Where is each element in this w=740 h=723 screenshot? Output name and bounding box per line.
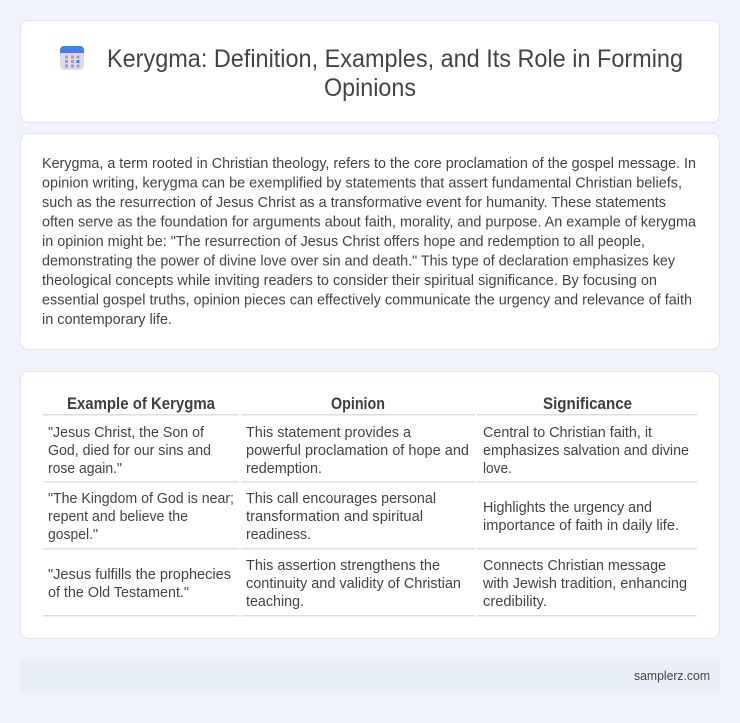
- table row 1: Central to Christian faith, it: [483, 425, 652, 441]
- panel: title header: [20, 20, 720, 122]
- title: [107, 45, 683, 102]
- table row 3: [48, 558, 687, 610]
- table row 3: Connects Christian message: [483, 558, 666, 574]
- text block: paragraph: in contemporary life.: [42, 312, 172, 328]
- title: Kerygma: Definition, Examples, and Its Role in Forming: [107, 45, 683, 73]
- table row 1: God, died for our sins and: [48, 443, 211, 459]
- table row 2: Highlights the urgency and: [483, 500, 652, 516]
- table row 2: [48, 491, 679, 543]
- icon: calendar: [60, 46, 84, 70]
- table header row: Opinion: [331, 395, 385, 413]
- table row 2: importance of faith in daily life.: [483, 518, 679, 534]
- table row 3: teaching.: [246, 594, 304, 610]
- table row 3: continuity and validity of Christian: [246, 576, 461, 592]
- text block: paragraph: demonstrating the power of divine love over sin and death." This type of declaration emphasizes key: [42, 254, 676, 270]
- table row 1: love.: [483, 461, 512, 477]
- table header row: Example of Kerygma: [67, 395, 216, 413]
- text block: paragraph: in opinion might be: "The resurrection of Jesus Christ offers hope and redemption to all people,: [42, 234, 645, 250]
- text block: paragraph: such as the resurrection of Jesus Christ as a transformative event for humanity. These statements: [42, 195, 666, 211]
- table row 3: This assertion strengthens the: [246, 558, 440, 574]
- table row 2: transformation and spiritual: [246, 509, 423, 525]
- table header row: [67, 395, 632, 413]
- text block: paragraph: essential gospel truths, opinion pieces can effectively communicate the urgency and relevance of faith: [42, 292, 692, 308]
- table row 1: rose again.": [48, 461, 122, 477]
- table header row: Significance: [543, 395, 632, 413]
- title: Opinions: [324, 74, 416, 102]
- text block: paragraph: [42, 156, 697, 328]
- panel: definition paragraph: [20, 134, 720, 350]
- table row 1: redemption.: [246, 461, 322, 477]
- table row 2: readiness.: [246, 527, 311, 543]
- text block: paragraph: theological concepts while inviting readers to consider their spiritual significance. By focusing on: [42, 273, 657, 289]
- footer bar: [20, 659, 720, 693]
- panel: examples table: [20, 372, 720, 638]
- table row 3: "Jesus fulfills the prophecies: [48, 567, 231, 583]
- text block: paragraph: Kerygma, a term rooted in Christian theology, refers to the core proclamation of the gospel message. In: [42, 156, 696, 172]
- text block: paragraph: often serve as the foundation for arguments about faith, morality, and purpose. An example of kerygma: [42, 214, 697, 230]
- table row 1: powerful proclamation of hope and: [246, 443, 469, 459]
- table row 3: credibility.: [483, 594, 547, 610]
- table row 1: "Jesus Christ, the Son of: [48, 425, 205, 441]
- table row 3: with Jewish tradition, enhancing: [482, 576, 687, 592]
- text block: paragraph: opinion writing, kerygma can be exemplified by statements that assert fundamental Christian beliefs,: [42, 176, 682, 192]
- table row 2: This call encourages personal: [246, 491, 436, 507]
- table row 3: of the Old Testament.": [48, 585, 189, 601]
- table row 2: repent and believe the: [48, 509, 188, 525]
- table row 2: "The Kingdom of God is near;: [48, 491, 234, 507]
- table row 1: [48, 425, 689, 477]
- table row 1: emphasizes salvation and divine: [483, 443, 689, 459]
- table row 2: gospel.": [48, 527, 98, 543]
- footer source text: samplerz.com: [634, 669, 710, 683]
- table row 1: This statement provides a: [246, 425, 412, 441]
